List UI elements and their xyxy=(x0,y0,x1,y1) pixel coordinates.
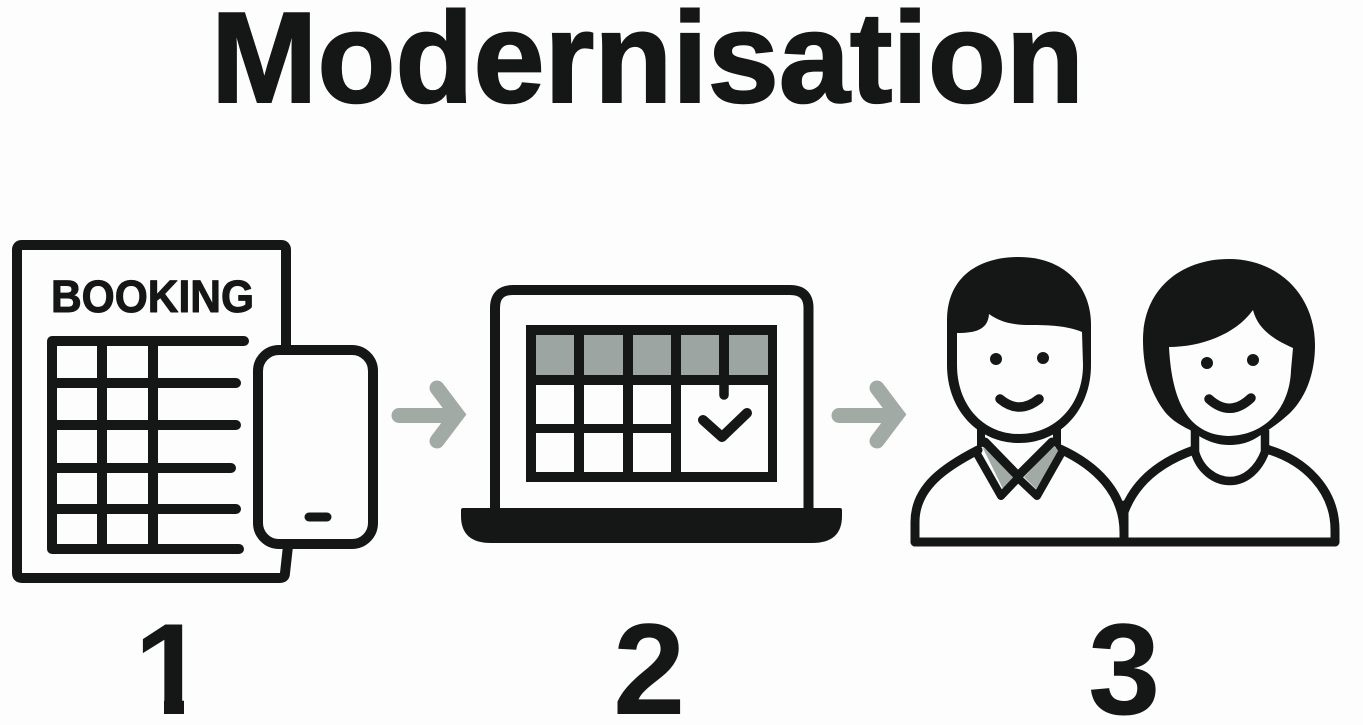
laptop base xyxy=(461,508,842,543)
icon: booking sheet and phone xyxy=(17,245,373,578)
ground line xyxy=(915,505,1335,542)
arrow: step 2 to step 3 xyxy=(839,388,897,441)
icon: two people xyxy=(915,257,1335,542)
calendar xyxy=(526,325,777,482)
icon: laptop with calendar xyxy=(461,290,842,543)
booking table grid xyxy=(52,341,244,549)
laptop screen frame xyxy=(495,290,808,510)
person: man xyxy=(915,257,1124,542)
arrow: step 1 to step 2 xyxy=(399,388,457,441)
person: woman xyxy=(1124,259,1335,542)
booking sheet outline xyxy=(17,245,288,578)
phone xyxy=(258,350,373,544)
booking heading: BOOKING xyxy=(51,271,254,322)
icon: check mark xyxy=(703,413,747,437)
